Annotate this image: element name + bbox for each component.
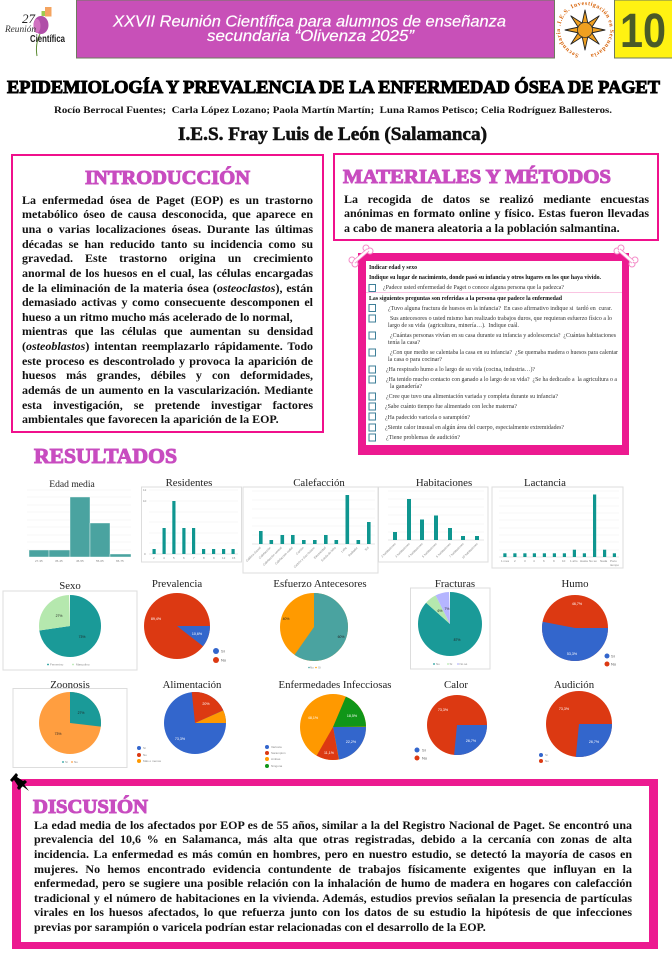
chart: Prevalencia pie — [144, 578, 227, 663]
chart: Alimentación pie: Sí — [143, 746, 146, 750]
survey questions: ¿Cree que tuvo una alimentación variada y completa durante su infancia? — [386, 393, 558, 400]
chart: Calefacción: Sol — [364, 546, 370, 552]
survey questions: ¿Sabe cuánto tiempo fue alimentado con leche materna? — [385, 403, 517, 410]
chart: Residentes: 2 — [153, 556, 155, 560]
text block: introducción: (osteoblastos) intentan reemplazarlo rápidamente. Todo — [22, 339, 313, 353]
chart: Calefacción: Calefacción — [293, 477, 345, 489]
text block: materiales y métodos: La recogida de datos se realizó mediante encuestas — [344, 192, 649, 206]
chart: Audición pie — [539, 679, 612, 763]
text block: introducción: gravedad. Este trastorno origina un crecimiento — [22, 251, 313, 265]
chart: Habitaciones: 4 habitaciones — [407, 542, 424, 558]
survey questions: ¿Ha respirado humo a lo largo de su vida (cocina, industria…)? — [386, 366, 535, 373]
logo: Reunión Científica: 27 — [22, 11, 36, 26]
chart: Edad media histogram: 45-55 — [76, 559, 84, 563]
chart: Alimentación pie: 73,3% — [175, 737, 186, 741]
chart: Audición pie: No — [545, 759, 549, 763]
text block: introducción: anormal de los huesos en el cual, las células encargadas — [22, 266, 313, 280]
chart: Habitaciones: 3 habitaciones — [394, 542, 411, 558]
chart: Edad media histogram: 27-35 — [35, 559, 43, 563]
chart: Prevalencia pie: Sí — [221, 648, 226, 654]
header band — [76, 0, 554, 58]
chart: Calefacción: Radiador — [347, 546, 359, 557]
logo: Reunión Científica: Reunión — [4, 24, 37, 34]
text block: introducción: huesos más grandes, débiles y con deformidades, — [22, 368, 313, 382]
text block: introducción: además de un aumento en la vascularización. Mediante — [22, 383, 313, 397]
authors: Rocío Berrocal Fuentes; Carla López Lozano; Paola Martín Martín; Luna Ramos Petisco; Celia Rodríguez Ballesteros. — [54, 105, 612, 115]
heading: Resultados: RESULTADOS — [34, 444, 177, 468]
chart: Audición pie: 26,7% — [589, 740, 600, 744]
text block: materiales y métodos: anónimas en formato online y físico. Estas fueron llevadas — [344, 206, 649, 220]
chart: Habitaciones: 2 habitaciones — [380, 542, 397, 558]
chart: Habitaciones: Habitaciones — [416, 477, 472, 489]
chart: Edad media histogram: Edad media — [49, 479, 96, 490]
text block: introducción: demasiado activas y como consecuente descomponen el — [22, 295, 313, 309]
text block: introducción — [22, 193, 313, 426]
text block: discusión: previas por sarampión o varicela podrían estar relacionadas con el desarrollo de la EOP. — [34, 920, 486, 934]
logo: sun I.E.S. Investigación en Secundaria: Secundaria .I.E.S. Investigación en Secundaria — [556, 2, 614, 58]
text block: introducción: metabólico óseo de causa desconocida, que aparece en — [22, 207, 313, 221]
panel: discusión — [12, 779, 658, 949]
logo: Reunión Científica: Científica — [30, 34, 65, 45]
chart: Calefacción: Caldera Gasoil — [245, 546, 262, 563]
survey questions: ¿Tiene problemas de audición? — [386, 435, 460, 441]
chart: Esfuerzo Antecesores pie: Esfuerzo Antecesores — [273, 578, 367, 590]
survey questions — [366, 265, 622, 441]
chart: Lactancia — [492, 477, 623, 568]
text block: introducción: una o varias localizaciones óseas. Durante las últimas — [22, 222, 313, 236]
text block: discusión — [34, 818, 632, 934]
chart: Lactancia: tiempo — [610, 563, 619, 567]
text block: materiales y métodos: a cabo de manera aleatoria a la población salmantina. — [344, 221, 620, 235]
header band: XXVII Reunión Científica para alumnos de enseñanza — [112, 14, 506, 30]
text block: discusión: incidencia. La enfermedad es más común en hombres, pero en nuestro estudio, se detectó la mayoría de casos en — [34, 847, 632, 861]
chart: Lactancia: 10 — [562, 559, 566, 563]
chart: Enfermedades Infecciosas pie: Varicela — [271, 745, 282, 749]
chart: Residentes: 5 — [173, 556, 175, 560]
chart: Enfermedades Infecciosas pie: 11,1% — [324, 751, 335, 755]
panel: questionnaire — [349, 245, 638, 455]
chart: Habitaciones: 10 habitaciones — [461, 542, 479, 560]
survey questions: la ganadería? — [390, 384, 422, 390]
chart: Zoonosis pie — [13, 679, 127, 768]
chart: Enfermedades Infecciosas pie: Sarampión — [271, 751, 286, 755]
survey questions: ¿Con que medio se calentaba la casa en su infancia? ¿Se quemaba madera o huesos para calentar — [390, 349, 618, 356]
chart: Esfuerzo Antecesores pie: Sí — [318, 666, 321, 670]
chart: Residentes: 4 — [163, 556, 165, 560]
text block: introducción: hueso a un ritmo mucho más acelerado de lo normal, — [22, 310, 293, 324]
chart: Prevalencia pie: No — [221, 658, 227, 662]
chart: Calefacción: Calefacción — [258, 546, 272, 560]
chart: Humo pie — [542, 578, 617, 666]
panel: introducción — [11, 154, 324, 433]
text block: discusión: mujeres. No hemos encontrado evidencia contundente de trabajos físicamente exigentes que influyan en la — [34, 862, 632, 876]
chart: Lactancia: Poco — [610, 559, 617, 563]
chart: Fracturas pie: Sí — [450, 662, 453, 666]
text block: materiales y métodos — [344, 192, 649, 235]
survey questions: Indicar edad y sexo — [369, 265, 417, 271]
chart: Edad media histogram — [27, 479, 131, 563]
text block: introducción: este proceso es descontrolado y provoca la aparición de — [22, 354, 313, 368]
chart: Lactancia: 4 — [533, 559, 535, 563]
poster number 10: 10 — [620, 5, 666, 58]
chart: Enfermedades Infecciosas pie: 22,2% — [346, 740, 357, 744]
chart: Calor pie: No — [422, 756, 428, 760]
chart: Calefacción: Estufa de leña — [320, 546, 337, 562]
chart: Edad media histogram: 55-65 — [96, 559, 104, 563]
chart: Humo pie: Sí — [611, 654, 616, 658]
heading: Discusión: DISCUSIÓN — [33, 794, 149, 818]
text block: discusión: La edad media de los afectados por EOP es de 55 años, similar a la del Registro Nacional de Paget. Se encontró una — [34, 818, 632, 832]
chart: Alimentación pie — [137, 679, 226, 763]
chart: Residentes: Residentes — [166, 477, 212, 489]
chart: Lactancia: 9 — [553, 559, 555, 563]
chart: Residentes: 8 — [203, 556, 205, 560]
chart: Esfuerzo Antecesores pie: No — [310, 666, 314, 670]
chart: Fracturas pie: 7% — [445, 607, 449, 611]
chart: Humo pie: 46,7% — [572, 602, 583, 606]
chart: Zoonosis pie: Zoonosis — [50, 679, 90, 691]
chart: Habitaciones: 6 habitaciones — [435, 542, 452, 558]
chart: Zoonosis pie: No — [74, 760, 78, 764]
chart: Alimentación pie: No — [143, 753, 147, 757]
icon: black push pin — [10, 773, 29, 791]
chart: Audición pie: Audición — [554, 679, 595, 691]
chart: Lactancia: 1 mes — [501, 559, 510, 563]
survey questions: ¿Cuántas personas vivían en su casa durante su infancia y adolescencia? ¿Cuántas habitaciones — [390, 332, 617, 339]
chart: Residentes: 10 — [143, 499, 147, 503]
chart: Alimentación pie: Más o menos — [143, 759, 162, 763]
chart: Audición pie: Sí — [545, 753, 548, 757]
chart: Prevalencia pie: Prevalencia — [152, 578, 202, 590]
survey questions: la casa o para cocinar? — [388, 357, 442, 363]
chart: Lactancia: Nada — [600, 559, 608, 563]
chart: Residentes: 9 — [213, 556, 215, 560]
chart: Prevalencia pie: 89,4% — [151, 617, 162, 621]
chart: Calor pie: 73,3% — [438, 708, 449, 712]
chart: Lactancia: 3 — [524, 559, 526, 563]
chart: Sexo pie: 73% — [79, 635, 85, 639]
chart: Lactancia: Lactancia — [524, 477, 566, 489]
chart: Habitaciones: 5 habitaciones — [421, 542, 438, 558]
chart: Calefacción: Carbón y Gas butano — [293, 546, 316, 569]
chart: Calor pie: Sí — [422, 748, 427, 752]
chart: Humo pie: Humo — [562, 578, 588, 590]
survey questions: ¿Ha tenido mucho contacto con ganado a lo largo de su vida? ¿Se ha dedicado a la agricultura o a — [386, 377, 617, 383]
chart: Residentes: 12 — [222, 556, 226, 560]
text block: introducción: de la eliminación de la materia ósea (osteoclastos), están — [22, 281, 313, 295]
chart: Enfermedades Infecciosas pie: 48,1% — [308, 716, 319, 720]
chart: Calefacción: Leña — [340, 546, 348, 553]
chart: Lactancia: 6 — [543, 559, 545, 563]
chart: Edad media histogram: 65-75 — [116, 559, 124, 563]
chart: Alimentación pie: Alimentación — [163, 679, 222, 691]
text block: discusión: tradicional y el número de habitaciones en la vivienda. Además, estudios previos señalan la presencia de partículas — [34, 891, 632, 905]
panel: materiales y métodos — [333, 153, 659, 241]
chart: Fracturas pie: No sé — [460, 662, 468, 666]
chart: Humo pie: No — [611, 662, 617, 666]
chart: Calor pie — [414, 679, 487, 760]
text block: introducción: ambientales que favorecen la aparición de la EOP. — [22, 412, 279, 426]
text block: introducción: décadas se han reducido tanto su incidencia como su — [22, 237, 313, 251]
chart: Enfermedades Infecciosas pie: Ambas — [271, 757, 281, 761]
heading: Introducción: INTRODUCCIÓN — [85, 165, 251, 189]
school: I.E.S. Fray Luis de León (Salamanca) — [178, 124, 487, 145]
chart: Sexo pie: Sexo — [59, 580, 81, 592]
chart: Calefacción — [243, 477, 378, 573]
chart: Sexo pie: Masculino — [76, 662, 90, 666]
survey questions: ¿Tuvo alguna fractura de huesos en la infancia? En caso afirmativo indique si tardó en curar. — [388, 305, 612, 312]
chart: Audición pie: 73,3% — [559, 707, 570, 711]
chart: Enfermedades Infecciosas pie: 18,5% — [347, 714, 358, 718]
icon: bone left — [349, 245, 373, 267]
survey questions: ¿Siente calor inusual en algún área del cuerpo, especialmente extremidades? — [385, 425, 564, 431]
chart: Lactancia: No sé — [589, 559, 597, 563]
chart: Enfermedades Infecciosas pie: Ninguna — [271, 764, 283, 768]
chart: Residentes: 7 — [193, 556, 195, 560]
chart: Fracturas pie — [410, 578, 490, 669]
survey questions: Sus antecesores o usted mismo han realizado trabajos duros, que requieran esfuerzo físico a lo — [390, 315, 612, 322]
chart: Calefacción: Electricidad — [313, 546, 327, 560]
chart: Residentes: 15 — [232, 556, 236, 560]
survey questions: Las siguientes preguntas son referidas a la persona que padece la enfermedad — [369, 296, 563, 302]
chart: Calefacción: Calefacción radial — [274, 546, 294, 566]
chart: Enfermedades Infecciosas pie — [265, 679, 392, 768]
text block: discusión: virales en los huesos afectados, lo que refuerza junto con los datos de su estudio la hipótesis de que infecciones — [34, 905, 632, 919]
survey questions: ¿Ha padecido varicela o sarampión? — [385, 415, 470, 421]
chart: Habitaciones: 7 habitaciones — [448, 542, 465, 558]
logo: Reunión Científica — [4, 7, 65, 56]
text block: introducción: mientras que las células que aumentan su densidad — [22, 324, 313, 338]
chart: Calor pie: Calor — [444, 679, 468, 691]
icon: bone right — [614, 245, 638, 267]
chart: Fracturas pie: No — [436, 662, 440, 666]
text block: discusión: enfermedad, pero se sugiere una posible relación con la inhalación de humo de madera en hogares con calefacción — [34, 876, 632, 890]
chart: Esfuerzo Antecesores pie: 60% — [338, 635, 344, 639]
chart: Fracturas pie: 6% — [438, 609, 442, 613]
chart: Sexo pie: 27% — [56, 614, 62, 618]
chart: Zoonosis pie: 27% — [78, 711, 84, 715]
survey questions: largo de su vida (agricultura, minería…). Indique cuál. — [388, 322, 519, 329]
survey checkboxes — [369, 284, 376, 441]
chart: Residentes: 6 — [183, 556, 185, 560]
chart: Enfermedades Infecciosas pie: Enfermedades Infecciosas — [278, 679, 392, 691]
survey questions: ¿Padece usted enfermedad de Paget o conoce alguna persona que la padezca? — [383, 284, 564, 291]
chart: Zoonosis pie: 73% — [55, 732, 61, 736]
survey questions: tenía la casa? — [388, 340, 420, 346]
chart: Esfuerzo Antecesores pie: 40% — [283, 617, 289, 621]
chart: Humo pie: 53,3% — [567, 652, 578, 656]
survey questions: Indique su lugar de nacimiento, donde pasó su infancia y otros lugares en los que haya vivido. — [369, 275, 601, 281]
chart: Residentes: 12 — [143, 488, 147, 492]
chart: Lactancia: 2 — [514, 559, 516, 563]
chart: Edad media histogram: 35-45 — [55, 559, 63, 563]
chart: Zoonosis pie: Sí — [65, 760, 68, 764]
chart: Prevalencia pie: 10,6% — [192, 632, 203, 636]
chart: Calor pie: 26,7% — [466, 739, 477, 743]
chart: Sexo pie: Femenino — [50, 662, 64, 666]
text block: introducción: esta investigación, se pretende investigar factores — [22, 398, 313, 412]
chart: Fracturas pie: Fracturas — [435, 578, 475, 590]
chart: Residentes — [142, 477, 242, 562]
chart: Calefacción: Calefacción central — [262, 546, 283, 567]
chart: Habitaciones — [378, 477, 488, 562]
chart: Lactancia: 1 año — [570, 559, 578, 563]
chart: Lactancia: Hasta — [580, 559, 588, 563]
chart: Fracturas pie: 87% — [454, 638, 460, 642]
text block: introducción: La enfermedad ósea de Paget (EOP) es un trastorno — [22, 193, 313, 207]
chart: Calefacción: Carbón — [295, 546, 305, 556]
text block: discusión: prevalencia del 10,6 % en Salamanca, más alta que otras registradas, debido a la cercanía con zonas de alta — [34, 832, 632, 846]
header band: secundaria “Olivenza 2025” — [207, 28, 415, 45]
heading: Materiales y métodos: MATERIALES Y MÉTODOS — [343, 165, 611, 188]
chart: Esfuerzo Antecesores pie — [273, 578, 367, 670]
chart: Alimentación pie: 20% — [202, 702, 210, 706]
chart: Sexo pie — [3, 580, 137, 670]
chart: Residentes: 0 — [144, 552, 146, 556]
main title: EPIDEMIOLOGÍA Y PREVALENCIA DE LA ENFERMEDAD ÓSEA DE PAGET — [7, 76, 660, 97]
